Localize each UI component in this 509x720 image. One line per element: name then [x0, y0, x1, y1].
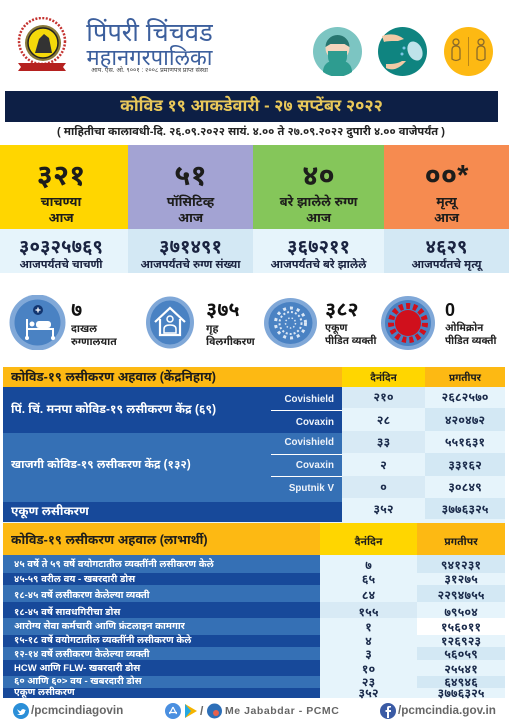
daily and cumulative values: ५६०५९ — [444, 647, 478, 661]
stat: omicron: पीडित व्यक्ती — [445, 336, 496, 347]
row labels: ४५-५९ वरील वय - खबरदारी डोस — [14, 574, 135, 585]
stat: admitted: दाखल — [71, 323, 97, 335]
mobile app: / — [200, 704, 203, 718]
daily and cumulative values: ५५१६३१ — [445, 435, 485, 449]
table header: प्रगतीपर — [449, 373, 481, 384]
row group: private centres: खाजगी कोविड-१९ लसीकरण केंद्र (१३२) — [11, 459, 191, 471]
row group: PCMC centres: Covaxin — [296, 417, 334, 428]
panel: recovered — [253, 145, 384, 273]
daily and cumulative values: २३ — [362, 675, 375, 689]
panel: tests — [0, 145, 128, 273]
panel: deaths: ००* — [425, 160, 468, 192]
stat: admitted: ७ — [71, 299, 82, 321]
icon: house — [146, 296, 194, 348]
daily and cumulative values: ३ — [365, 647, 372, 661]
panel: recovered: आज — [306, 210, 331, 225]
icon: play store — [185, 704, 197, 718]
footer social links — [13, 703, 496, 719]
stat: omicron: ओमिक्रोन — [445, 323, 483, 334]
panel: positive: ३७१४९१ — [159, 236, 222, 257]
title banner: कोविड १९ आकडेवारी - २७ सप्टेंबर २०२२ — [120, 97, 383, 115]
table header: दैनंदिन — [355, 536, 382, 548]
row labels: १८-४५ वर्षे लसीकरण केलेल्या व्यक्ती — [14, 590, 150, 601]
daily and cumulative values: ३३ — [377, 435, 390, 449]
icon: virus — [264, 298, 317, 348]
table header — [3, 523, 505, 555]
row: total vaccination: एकूण लसीकरण — [11, 504, 89, 518]
twitter handle: /pcmcindiagovin — [31, 704, 123, 717]
panel: tests: ३२१ — [37, 160, 85, 192]
daily and cumulative values: १५६०११ — [441, 620, 481, 634]
stat: omicron — [381, 296, 497, 350]
stat: omicron: 0 — [445, 300, 455, 320]
panel: positive: पॉसिटिव्ह — [167, 194, 214, 209]
panel: deaths: आजपर्यंतचे मृत्यू — [412, 259, 481, 271]
daily and cumulative values: २५५४१ — [444, 662, 478, 676]
row labels — [3, 555, 320, 698]
row labels: १८-४५ वर्षे सावधगिरीचा डोस — [14, 607, 120, 618]
facebook handle — [380, 703, 496, 719]
icon: hand sanitizer — [378, 27, 427, 76]
logo emblem — [18, 17, 66, 71]
facebook handle: /pcmcindia.gov.in — [398, 704, 496, 717]
stat: home isolation: गृह — [206, 323, 218, 335]
row group: PCMC centres: पिं. चिं. मनपा कोविड-१९ लसीकरण केंद्र (६९) — [11, 402, 216, 416]
daily and cumulative values: ४ — [365, 634, 372, 648]
row group: private centres — [3, 433, 342, 502]
title banner — [5, 91, 498, 122]
row: total vaccination — [3, 502, 342, 522]
daily and cumulative values: २१० — [373, 390, 394, 404]
daily and cumulative values: ६५ — [362, 572, 375, 586]
row labels: HCW आणि FLW- खबरदारी डोस — [14, 663, 140, 674]
stat: total affected: एकूण — [325, 323, 347, 334]
table: centre-wise vaccination — [3, 367, 505, 523]
stat: admitted: रुग्णालयात — [71, 336, 117, 348]
panel: positive — [128, 145, 253, 273]
header: आय. एस. ओ. ९००१ : २००८ प्रमाणपत्र प्राप्त संस्था — [91, 67, 208, 74]
header: महानगरपालिका — [86, 45, 212, 70]
panel: recovered: ३६७२११ — [287, 236, 350, 257]
row group: private centres: Covaxin — [296, 460, 334, 471]
twitter handle — [13, 703, 123, 719]
table header: कोविड-१९ लसीकरण अहवाल (केंद्रनिहाय) — [11, 370, 216, 384]
daily and cumulative values: १२६९२३ — [441, 634, 481, 648]
panel: tests: आजपर्यंतचे चाचणी — [19, 259, 103, 271]
daily and cumulative values: ३०८४९ — [448, 480, 482, 494]
mobile app: Me Jababdar - PCMC — [225, 705, 339, 717]
stat: home isolation: ३७५ — [206, 299, 240, 321]
icon: app store — [165, 703, 181, 719]
daily and cumulative values: १ — [365, 620, 372, 634]
panel: deaths — [384, 145, 509, 273]
row labels: ४५ वर्षे ते ५९ वर्षे वयोगटातील व्यक्तींनी लसीकरण केले — [14, 559, 214, 570]
panel: deaths: ४६२९ — [425, 236, 468, 257]
header — [18, 17, 493, 76]
daily and cumulative values: ९४१२३१ — [441, 558, 481, 572]
daily and cumulative values: २ — [380, 458, 387, 472]
daily and cumulative values: ३१२७५ — [444, 572, 478, 586]
daily and cumulative values: १० — [362, 662, 375, 676]
panel: tests: आज — [48, 210, 74, 225]
panel: deaths: मृत्यू — [436, 194, 457, 209]
daily and cumulative values: ३७७६३२५ — [441, 502, 489, 516]
daily and cumulative values: २६८२५७० — [441, 390, 489, 404]
icon: twitter — [13, 703, 29, 719]
stat: home isolation: विलगीकरण — [206, 336, 255, 348]
daily and cumulative values: ८४ — [362, 588, 375, 602]
organisation name: पिंपरी चिंचवड — [86, 19, 213, 47]
reporting period: ( माहितीचा कालावधी-दि. २६.०९.२०२२ सायं. ४.०० ते २७.०९.२०२२ दुपारी ४.०० वाजेपर्यंत ) — [57, 126, 445, 138]
panel: positive: आज — [178, 210, 203, 225]
icon: app logo — [207, 704, 222, 718]
panel: positive: ५१ — [174, 160, 207, 192]
panel: recovered: ४० — [302, 160, 335, 192]
stat: total affected: पीडित व्यक्ती — [325, 336, 376, 347]
row labels: १५-१८ वर्षे वयोगटातील व्यक्तींनी लसीकरण केले — [14, 635, 191, 646]
panel: positive: आजपर्यंतचे रुग्ण संख्या — [140, 259, 241, 271]
stat: total affected — [264, 298, 377, 348]
daily and cumulative values: १५५ — [358, 605, 379, 619]
row labels: १२-१४ वर्षे लसीकरण केलेल्या व्यक्ती — [14, 649, 150, 660]
row group: PCMC centres — [3, 387, 342, 433]
stat panels — [0, 145, 509, 273]
panel: tests: चाचण्या — [41, 194, 81, 209]
table: beneficiary vaccination — [3, 523, 505, 698]
icon: red virus — [381, 296, 435, 350]
daily and cumulative values — [320, 555, 505, 700]
daily and cumulative values: ६४९४६ — [444, 675, 478, 689]
row group: private centres: Covishield — [284, 437, 334, 448]
stat: home isolation — [146, 296, 255, 348]
table header: प्रगतीपर — [444, 536, 478, 548]
icon: distancing — [444, 27, 493, 76]
table header — [3, 367, 505, 387]
daily and cumulative values: २२९४७५५ — [437, 588, 485, 602]
icon: hospital bed — [10, 295, 66, 350]
icon: mask — [313, 27, 362, 76]
table header: दैनंदिन — [370, 373, 397, 384]
icon: facebook — [380, 703, 396, 719]
mobile app — [165, 703, 339, 719]
daily and cumulative values: ३३१६२ — [448, 458, 482, 472]
panel: tests: ३०३२५७६९ — [19, 236, 103, 257]
daily and cumulative values: ० — [380, 480, 387, 494]
row group: PCMC centres: Covishield — [284, 394, 334, 405]
daily and cumulative values: २८ — [377, 413, 390, 427]
daily and cumulative values — [342, 387, 505, 519]
panel: recovered: बरे झालेले रुग्ण — [280, 194, 357, 209]
daily and cumulative values: ३७७६३२५ — [437, 686, 485, 700]
row labels: ६० आणि ६०> वय - खबरदारी डोस — [14, 676, 142, 687]
daily and cumulative values: ७९५०४ — [444, 605, 478, 619]
stat: admitted — [10, 295, 117, 350]
panel: deaths: आज — [434, 210, 459, 225]
panel: recovered: आजपर्यंतचे बरे झालेले — [270, 259, 366, 271]
daily and cumulative values: ३५२ — [358, 686, 379, 700]
stat: total affected: ३८२ — [325, 299, 359, 321]
daily and cumulative values: ७ — [365, 558, 372, 572]
row labels: आरोग्य सेवा कर्मचारी आणि फ्रंटलाइन कामगार — [14, 621, 185, 632]
daily and cumulative values: ४२०४७२ — [445, 413, 485, 427]
table header: कोविड-१९ लसीकरण अहवाल (लाभार्थी) — [11, 533, 208, 547]
row labels: एकूण लसीकरण — [14, 687, 75, 698]
row group: private centres: Sputnik V — [289, 483, 334, 494]
daily and cumulative values: ३५२ — [373, 502, 394, 516]
